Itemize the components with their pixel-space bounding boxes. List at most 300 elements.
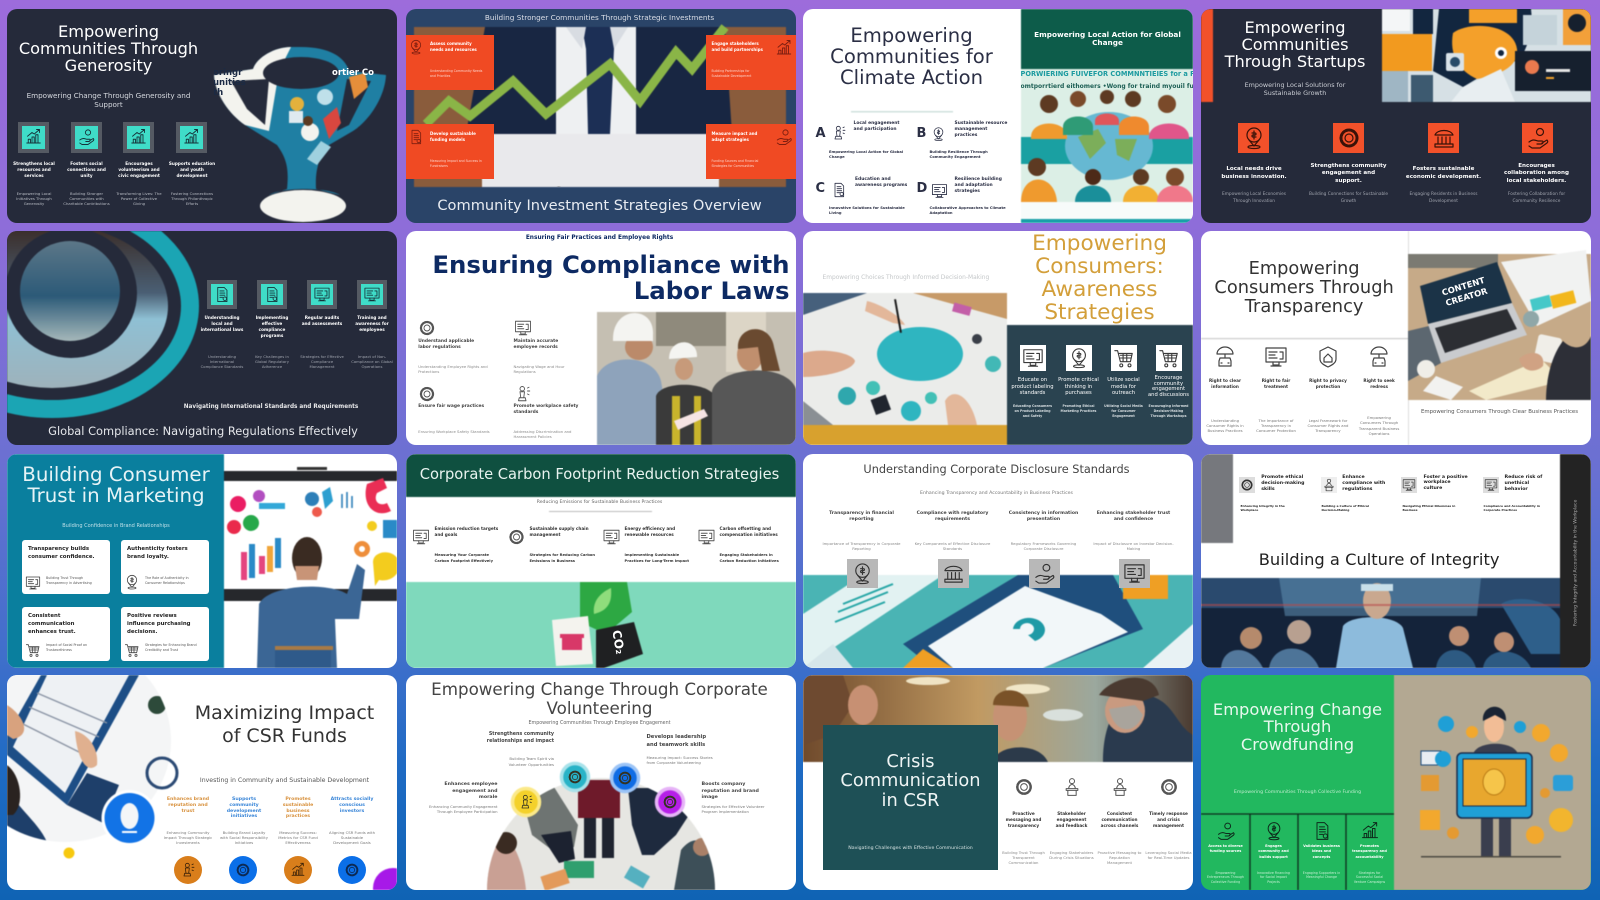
item text xyxy=(200,315,393,369)
subtitle: Navigating International Standards and Requirements xyxy=(184,404,358,410)
item text: Right to fair xyxy=(1262,378,1290,383)
item text: Right to privacy xyxy=(1309,378,1347,383)
item text: Regular audits xyxy=(305,315,339,320)
item text: Empowering xyxy=(1367,415,1391,420)
items: Ensure fair wage practices xyxy=(418,404,484,409)
icons xyxy=(1200,821,1394,841)
item labels: unity xyxy=(80,172,93,178)
icon 1 xyxy=(207,280,237,309)
item text: Educate on xyxy=(1018,377,1047,383)
meeting photo xyxy=(802,675,1192,890)
circle icons xyxy=(7,856,397,884)
item labels: development xyxy=(177,172,207,178)
item text: Understanding xyxy=(1211,418,1239,422)
item text: purchases xyxy=(1065,390,1092,396)
subtitle: Navigating Challenges with Effective Communication xyxy=(848,846,973,851)
letter items: A xyxy=(816,126,826,140)
title: Empowering xyxy=(1032,231,1167,256)
item text: Local needs drive xyxy=(1226,166,1282,172)
items: Maintain accurate xyxy=(514,339,558,344)
item text: product labeling xyxy=(1011,384,1054,390)
columns: conscious xyxy=(339,803,365,808)
items: Carbon Footprint Effectively xyxy=(434,559,493,563)
item text: Strategies for Effective xyxy=(300,354,344,358)
letter items: awareness programs xyxy=(855,182,907,188)
item text: and confidence xyxy=(1114,517,1153,522)
item text: Compliance on Global xyxy=(351,359,393,364)
item text: for Consumer xyxy=(1111,409,1136,413)
item text: Successful Social xyxy=(1356,875,1383,879)
letter items: Resilience building xyxy=(954,176,1002,182)
items: Ensuring Workplace Safety Standards xyxy=(418,429,490,434)
items: Carbon Reduction Initiatives xyxy=(720,559,779,563)
item text: Promotes xyxy=(1360,844,1379,848)
item text: international laws xyxy=(201,327,243,332)
panel: Empowering Communities for Climate Action xyxy=(802,8,1192,222)
item text: for Real-Time Updates xyxy=(1148,855,1189,860)
subtitle: Empowering Communities Through Employee Engagement xyxy=(528,721,671,726)
items: culture xyxy=(1424,486,1442,491)
items: Corporate Practices xyxy=(1484,508,1517,512)
box: engage: Sustainable Development xyxy=(712,74,751,78)
title: Consumers: xyxy=(1035,254,1164,279)
item text: Consumer Rights in xyxy=(1206,423,1244,428)
box: assess xyxy=(406,34,494,90)
subtitle: Enhancing Transparency and Accountability in Business Practices xyxy=(920,490,1073,496)
title: Strategies xyxy=(1044,300,1155,325)
item text: Promoting Ethical xyxy=(1062,404,1095,408)
items: Sustainable supply chain xyxy=(530,526,589,530)
card 3: communication xyxy=(28,620,74,626)
panel: Empowering Consumers: Awareness Strategies xyxy=(802,231,1192,445)
item labels: Generosity xyxy=(24,201,44,206)
item text: engagement xyxy=(1057,817,1086,822)
semicircle group photo and rings xyxy=(486,761,716,890)
item text: Access to diverse xyxy=(1208,844,1243,848)
trophy lettering: ortier Co xyxy=(332,68,374,78)
card 2: Authenticity fosters xyxy=(127,546,188,552)
item text: Engages xyxy=(1265,844,1282,848)
icon 1 xyxy=(1020,345,1046,371)
item labels: Communities with xyxy=(69,196,104,201)
panel: Empowering Change Through Crowdfunding xyxy=(1200,675,1590,890)
items: Business xyxy=(1402,508,1417,512)
panel: Empowering Communities Through Generosity xyxy=(7,8,397,222)
item text: Transparency in financial xyxy=(829,510,894,516)
item text xyxy=(1200,844,1394,888)
subtitle xyxy=(1245,81,1346,97)
columns: Impact Through Strategic xyxy=(164,835,212,840)
items: labor regulations xyxy=(418,345,461,350)
box: develop: Measuring Impact and Success in xyxy=(430,158,482,162)
item text: for Social Impact xyxy=(1260,875,1287,879)
callouts: Strengthens community xyxy=(489,732,554,737)
card 3: Consistent xyxy=(28,612,60,618)
title: Communities xyxy=(1242,35,1348,54)
banner and mint photo with cubes xyxy=(406,454,796,668)
items: unethical xyxy=(1504,481,1529,486)
card 1: Transparency builds xyxy=(28,546,89,552)
columns xyxy=(7,797,397,847)
item text xyxy=(802,811,1192,867)
items: behavior xyxy=(1504,487,1528,492)
icons xyxy=(998,777,1192,799)
title: Communities for xyxy=(830,45,993,68)
title: Empowering xyxy=(58,22,159,40)
items: Emission reduction targets xyxy=(434,526,498,530)
callouts: engagement and xyxy=(452,789,498,794)
title: Maximizing Impact xyxy=(195,702,374,724)
item text: Encourage xyxy=(1155,375,1182,381)
title xyxy=(1213,701,1382,753)
title xyxy=(1224,18,1365,71)
items: workplace xyxy=(1424,480,1451,485)
title: Global Compliance: Navigating Regulations Effectively xyxy=(48,424,358,438)
items: Regulations xyxy=(514,369,536,374)
photo: workers with hard hats xyxy=(596,311,796,445)
gray subtitle: Empowering Choices Through Informed Decision-Making xyxy=(822,274,989,280)
item text: Transparency xyxy=(1315,428,1341,433)
panel: Understanding Corporate Disclosure Standards xyxy=(802,454,1192,668)
card 4: influence purchasing xyxy=(127,620,191,626)
title: Through xyxy=(1264,717,1331,736)
photo label: CONTENT xyxy=(1440,275,1485,298)
icon 1 xyxy=(846,558,878,588)
card 2: brand loyalty. xyxy=(127,554,169,560)
items: Implementing Sustainable xyxy=(624,553,679,557)
item labels: Initiatives Through xyxy=(16,196,52,201)
columns: Supports xyxy=(232,797,256,802)
item labels: volunteerism and xyxy=(118,166,160,172)
callouts: image xyxy=(702,795,718,800)
columns: trust xyxy=(182,809,194,814)
items: Enhancing Integrity in the xyxy=(1240,504,1285,508)
item text: Engagement xyxy=(1112,414,1135,418)
card 2 xyxy=(121,540,209,594)
item text: compliance xyxy=(259,327,285,332)
icon 3 xyxy=(123,122,154,152)
item text: Collective Funding xyxy=(1211,880,1240,884)
item text xyxy=(1011,375,1189,418)
heading: Building Stronger Communities Through Strategic Investments xyxy=(485,12,714,22)
title: Building a Culture of Integrity xyxy=(1259,550,1499,568)
letter items: Living xyxy=(829,211,842,215)
columns: Attracts socially xyxy=(331,797,373,802)
item text: local stakeholders. xyxy=(1507,178,1566,184)
item text: programs xyxy=(261,333,283,338)
item text: Communication xyxy=(1009,860,1038,865)
title: Crisis xyxy=(886,751,935,772)
item text: transparency xyxy=(1008,823,1039,828)
item text: standards xyxy=(1020,390,1045,396)
item text: Empowering xyxy=(1216,870,1235,874)
item text: effective xyxy=(262,321,282,326)
item labels: Empowering Local xyxy=(17,190,51,196)
columns: Aligning CSR Funds with xyxy=(329,830,375,834)
item text: reporting xyxy=(849,517,874,522)
item text: Compliance Standards xyxy=(201,364,243,369)
title: Corporate Carbon Footprint Reduction Strategies xyxy=(420,466,779,482)
callouts: and teamwork skills xyxy=(646,742,705,748)
items: Decision-Making xyxy=(1322,508,1349,512)
callouts: reputation and brand xyxy=(702,789,759,794)
panel: Global Compliance xyxy=(7,231,397,445)
document illustration xyxy=(803,574,1193,668)
box: assess: needs and resources xyxy=(430,46,477,52)
title: Generosity xyxy=(65,56,152,74)
items: compensation initiatives xyxy=(720,532,778,536)
item text: Key Components of Effective Disclosure xyxy=(915,541,990,546)
items: decision-making xyxy=(1261,481,1304,486)
title: Crowdfunding xyxy=(1241,735,1354,754)
box: develop: Develop sustainable xyxy=(430,130,476,136)
item text: Understanding xyxy=(208,354,236,358)
icon 3 xyxy=(307,280,337,309)
card 1: Building Trust Through xyxy=(46,576,83,580)
columns: community xyxy=(229,803,259,808)
letter items: C xyxy=(816,180,825,196)
letter items: Education and xyxy=(855,176,891,182)
item text: Transparency in xyxy=(1261,423,1291,428)
title xyxy=(195,702,374,748)
item text: Encourages xyxy=(1518,162,1555,168)
item text: The Importance of xyxy=(1259,418,1293,422)
item labels: Fosters social xyxy=(70,160,103,166)
title: Labor Laws xyxy=(634,276,790,305)
letter items: and participation xyxy=(854,126,897,132)
item text: employees xyxy=(359,327,385,332)
items: management xyxy=(530,532,561,536)
items: Enhance xyxy=(1342,474,1365,480)
box: assess: Assess community xyxy=(430,40,472,46)
card 3: enhances trust. xyxy=(28,628,76,634)
panel: Crisis Communication in CSR xyxy=(802,675,1192,890)
item text: awareness for xyxy=(355,321,389,326)
icon row xyxy=(18,122,207,153)
item text: community and xyxy=(1258,849,1289,853)
item text: engagement xyxy=(1152,386,1185,392)
letter items: D xyxy=(916,180,927,196)
photo label: CREATOR xyxy=(1444,286,1488,308)
callouts: Program Implementation xyxy=(702,809,749,814)
concentric ring image with lens xyxy=(7,231,200,419)
panel: Building a Culture of Integrity xyxy=(1200,454,1590,668)
items: Navigating Wage and Hour xyxy=(514,364,565,369)
letter items: Community Engagement xyxy=(930,155,981,159)
card 4: decisions. xyxy=(127,628,157,634)
title: Understanding Corporate Disclosure Standards xyxy=(863,463,1130,476)
card 4: Strategies for Enhancing Brand xyxy=(145,642,197,646)
item text: builds support xyxy=(1259,855,1288,859)
items: employee records xyxy=(514,345,558,350)
item text: Understanding xyxy=(204,315,240,320)
columns: investors xyxy=(340,809,364,814)
item text: Empowering Local Economies xyxy=(1222,192,1286,196)
icon 2 xyxy=(71,122,102,152)
icon 2 xyxy=(257,280,287,309)
card 1: consumer confidence. xyxy=(28,554,95,560)
items: Promote workplace safety xyxy=(514,404,578,409)
item text: Strategies for xyxy=(1359,870,1380,874)
beige illustration with person and tablet xyxy=(1200,675,1590,890)
item labels: Charitable Contributions xyxy=(63,201,110,206)
item text: Adherence xyxy=(262,364,282,369)
letter items: practices xyxy=(954,132,977,138)
box: engage: Engage stakeholders xyxy=(712,40,759,46)
title: Empowering xyxy=(850,24,973,47)
photo: table with teal diagram xyxy=(803,292,1193,445)
item text: and discussions xyxy=(1148,392,1189,398)
item text: and feedback xyxy=(1056,823,1087,828)
item text: ideas and xyxy=(1312,849,1331,853)
item text: protection xyxy=(1316,384,1340,389)
letter items: B xyxy=(916,126,926,140)
title: Empowering xyxy=(1244,18,1346,37)
trophy image xyxy=(213,46,386,223)
card 2: Consumer Relationships xyxy=(145,581,185,585)
item text: outreach xyxy=(1112,390,1135,396)
panel: Corporate Carbon Footprint Reduction Strategies xyxy=(406,454,796,668)
item text: Proactive xyxy=(1012,811,1035,816)
item text: Stakeholder xyxy=(1057,811,1086,816)
items: and goals xyxy=(434,532,457,536)
columns: initiatives xyxy=(231,814,257,819)
item text: Impact of Non- xyxy=(358,354,386,358)
title: Volunteering xyxy=(547,698,652,718)
items: Navigating Ethical Dilemmas in xyxy=(1402,504,1455,508)
item text: media for xyxy=(1111,384,1136,390)
title: in CSR xyxy=(882,790,939,811)
title: Through Startups xyxy=(1225,52,1365,71)
icon 4 xyxy=(357,280,387,309)
title: Community Investment Strategies Overview xyxy=(437,196,762,214)
card 4 xyxy=(121,606,209,660)
dark panel xyxy=(823,725,998,870)
letter items: strategies xyxy=(954,188,980,194)
item labels: connections and xyxy=(67,166,106,172)
subtitle: Investing in Community and Sustainable Development xyxy=(200,777,369,784)
letter items: Innovative Solutions for Sustainable xyxy=(829,206,905,210)
icon 3 xyxy=(1110,345,1136,371)
item text: Standards xyxy=(943,546,962,551)
items: Promote ethical xyxy=(1261,474,1303,480)
item text: Utilizing Social Media xyxy=(1104,404,1143,408)
items: Understanding Employee Rights and xyxy=(418,364,488,369)
item text: Regulatory Frameworks Governing xyxy=(1011,541,1076,546)
callouts: Strategies for Effective Volunteer xyxy=(702,804,765,809)
box: engage xyxy=(706,34,796,90)
item labels: Supports education xyxy=(169,160,215,166)
icon 1 xyxy=(18,122,49,152)
item text xyxy=(1206,378,1400,436)
item text: Strengthens community xyxy=(1311,162,1386,168)
item text: business innovation. xyxy=(1221,174,1287,180)
title: Empowering Change xyxy=(1213,700,1382,719)
card 3 xyxy=(22,606,110,660)
accent stripe and collage image xyxy=(1201,9,1591,103)
item text: Projects xyxy=(1267,880,1280,884)
item text: and assessments xyxy=(302,321,342,326)
callouts: relationships and impact xyxy=(487,739,554,744)
panel: Community Investment Strategies Overview xyxy=(406,8,796,222)
subtitle xyxy=(27,91,190,109)
columns: Enhancing Community xyxy=(166,830,210,834)
item text: Reputation xyxy=(1109,855,1130,860)
callouts: morale xyxy=(479,795,498,800)
item text: across channels xyxy=(1101,823,1138,828)
item text: local and xyxy=(211,321,233,326)
item text: community xyxy=(1154,381,1183,387)
item text: Promote critical xyxy=(1058,377,1099,383)
item text: support. xyxy=(1335,178,1362,184)
columns: Sustainable xyxy=(341,835,363,840)
columns: practices xyxy=(286,814,310,819)
item text: Through Workshops xyxy=(1151,414,1186,418)
columns: Investments xyxy=(176,840,200,845)
item text: Management xyxy=(1107,860,1132,865)
cube label: CO₂ xyxy=(609,628,627,655)
item text: Compliance with regulatory xyxy=(917,510,988,516)
title: Trust in Marketing xyxy=(27,484,205,506)
letter items: and adaptation xyxy=(954,182,993,188)
title: Climate Action xyxy=(840,66,983,89)
title: Ensuring Compliance with xyxy=(432,250,790,279)
title: Awareness xyxy=(1042,277,1157,302)
subtitle: Support xyxy=(94,100,123,109)
item text: collaboration among xyxy=(1504,170,1569,176)
card 4: Positive reviews xyxy=(127,612,177,618)
icon 2 xyxy=(1332,122,1364,152)
items: Foster a positive xyxy=(1424,474,1468,480)
side text: Fostering Integrity and Accountability in the Workplace xyxy=(1573,499,1578,626)
items: Understand applicable xyxy=(418,339,474,344)
trophy lettering xyxy=(214,68,374,98)
green heading xyxy=(1034,30,1181,47)
icon 2 xyxy=(1066,345,1092,371)
title: Empowering Change Through Corporate xyxy=(431,679,768,699)
card 1: Transparency in Advertising xyxy=(46,581,92,585)
item text: Proactive Messaging to xyxy=(1098,850,1141,854)
title xyxy=(840,752,981,810)
item text: Building Trust Through xyxy=(1002,850,1045,854)
subtitle: Empowering Change Through Generosity and xyxy=(27,91,190,100)
icon 4 xyxy=(1522,122,1552,152)
side blocks and office photo xyxy=(1201,454,1591,668)
item text: Community Resilience xyxy=(1513,198,1560,204)
item text: communication xyxy=(1101,817,1138,822)
item text: Reporting xyxy=(852,546,871,551)
item text: Utilize social xyxy=(1107,377,1140,383)
item labels: services xyxy=(24,172,44,178)
columns: development xyxy=(227,809,261,814)
items xyxy=(413,526,779,563)
icons xyxy=(847,559,1150,588)
item text: During Crisis Situations xyxy=(1049,855,1094,860)
title xyxy=(431,680,768,717)
subtitle: Empowering Communities Through Collective Funding xyxy=(1234,790,1361,795)
item text: Consumer Protection xyxy=(1256,428,1296,433)
orange icons xyxy=(1238,123,1553,153)
item text: accountability xyxy=(1355,855,1383,859)
subtitle: Sustainable Growth xyxy=(1264,89,1326,97)
items: Carbon offsetting and xyxy=(720,526,771,530)
title xyxy=(19,22,198,74)
items: Addressing Discrimination and xyxy=(514,429,571,434)
callouts: Enhances employee xyxy=(444,782,498,787)
item labels xyxy=(13,160,215,206)
items: Building a Culture of Ethical xyxy=(1322,504,1369,508)
box: engage: Building Partnerships for xyxy=(712,68,750,72)
